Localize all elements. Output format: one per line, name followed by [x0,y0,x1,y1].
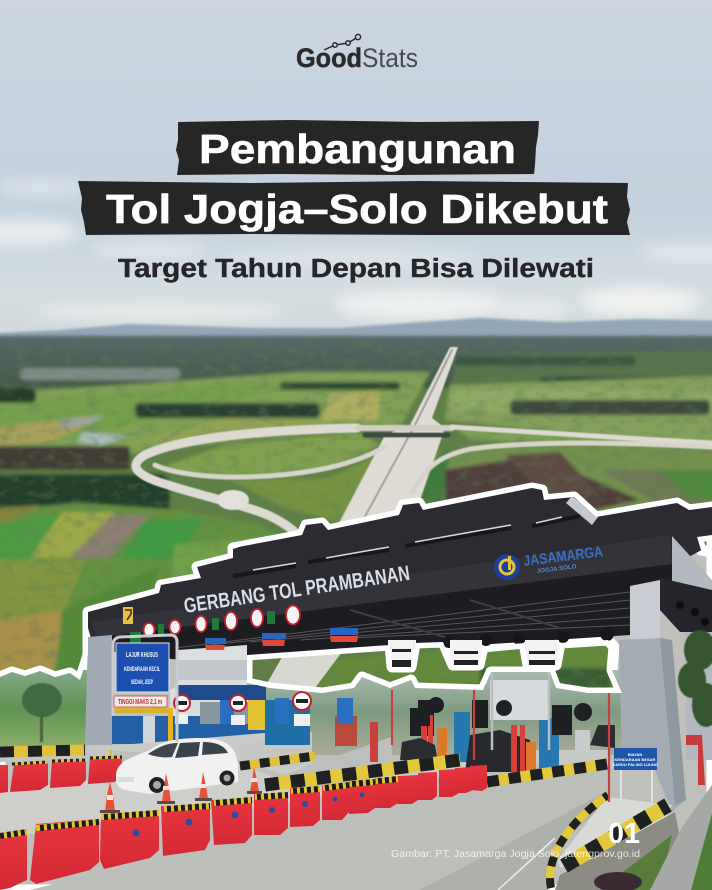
logo: GoodStats: Stats [362,43,418,73]
barrier hazard stripes [0,779,398,836]
back row red barriers [0,757,122,793]
photo contents clipped to the silhouette [0,480,712,890]
toll road continuing behind the gate [262,648,345,692]
signs on small posts [174,692,353,726]
height limit sign: TINGGI MAKS 2,1 m [118,699,162,706]
logo: GoodStats [296,34,418,73]
kerbs black and yellow [0,750,607,785]
speed limit signs [144,606,300,637]
front row red barriers [0,765,487,890]
image credit: Gambar: PT. Jasamarga Jogja Solo, jatengprov.go.id [391,848,640,860]
right traffic island [550,785,712,890]
title: Tol Jogja–Solo Dikebut [78,181,630,235]
PU ministry logo [123,607,133,624]
info sign by right column: GARDU PALING UJUNG [612,762,658,767]
title: Pembangunan: Pembangunan [199,126,516,172]
left grey column [85,635,112,745]
red poles [390,690,610,802]
panel: toll gate foreground photo with white cut-out border [0,480,712,890]
hanging lane signs [205,628,358,650]
blue lane sign: SEDAN, JEEP [131,680,153,686]
gate name: GERBANG TOL PRAMBANAN [182,562,411,618]
info sign by right column [612,748,658,802]
field and tree texture [0,335,712,705]
mountains on horizon [0,318,712,345]
white cut-out border [0,488,712,890]
info sign by right column: BIAYAN [628,752,642,757]
hanging lane signal boxes [388,640,559,670]
Jasamarga logo: JASAMARGA [522,543,604,570]
roof bevel [566,496,598,525]
background trees [240,670,630,755]
roof strip lights [233,516,580,576]
roof of the gate [80,480,712,642]
title: Tol Jogja–Solo Dikebut: Tol Jogja–Solo Dikebut [106,186,608,232]
subtitle: Target Tahun Depan Bisa Dilewati [118,255,594,283]
road surface [0,762,610,890]
height limit sign [114,696,167,707]
barrier badges [132,792,364,836]
logo rising line icon [324,34,361,50]
right wall and lamps [660,536,712,760]
roads of the interchange [136,347,712,540]
tree on right [678,630,712,727]
panel: sky background [0,0,712,345]
Jasamarga logo [494,543,604,580]
main gate signage [123,543,604,650]
tree [22,683,62,742]
traffic cones [100,767,262,813]
booth machinery [265,672,615,775]
title: Pembangunan [176,120,539,175]
blue lane sign [116,643,169,692]
Jasamarga logo: JOGJA SOLO [537,564,577,575]
logo: GoodStats: Good [296,43,362,73]
green lane indicators [130,611,275,646]
blue lane sign: KENDARAAN KECIL [124,666,160,673]
frame pole around lane sign [113,635,177,742]
white back wall [178,645,247,685]
blue lane sign: LAJUR KHUSUS [126,650,158,659]
page number: 01 [608,818,640,850]
panel: aerial view of toll interchange [0,335,712,710]
white car [116,738,238,794]
concrete islands [0,730,610,800]
booth [107,685,267,758]
info sign by right column: KENDARAAN BESAR [615,757,656,762]
gate ceiling [96,564,672,660]
right big column [619,580,686,812]
